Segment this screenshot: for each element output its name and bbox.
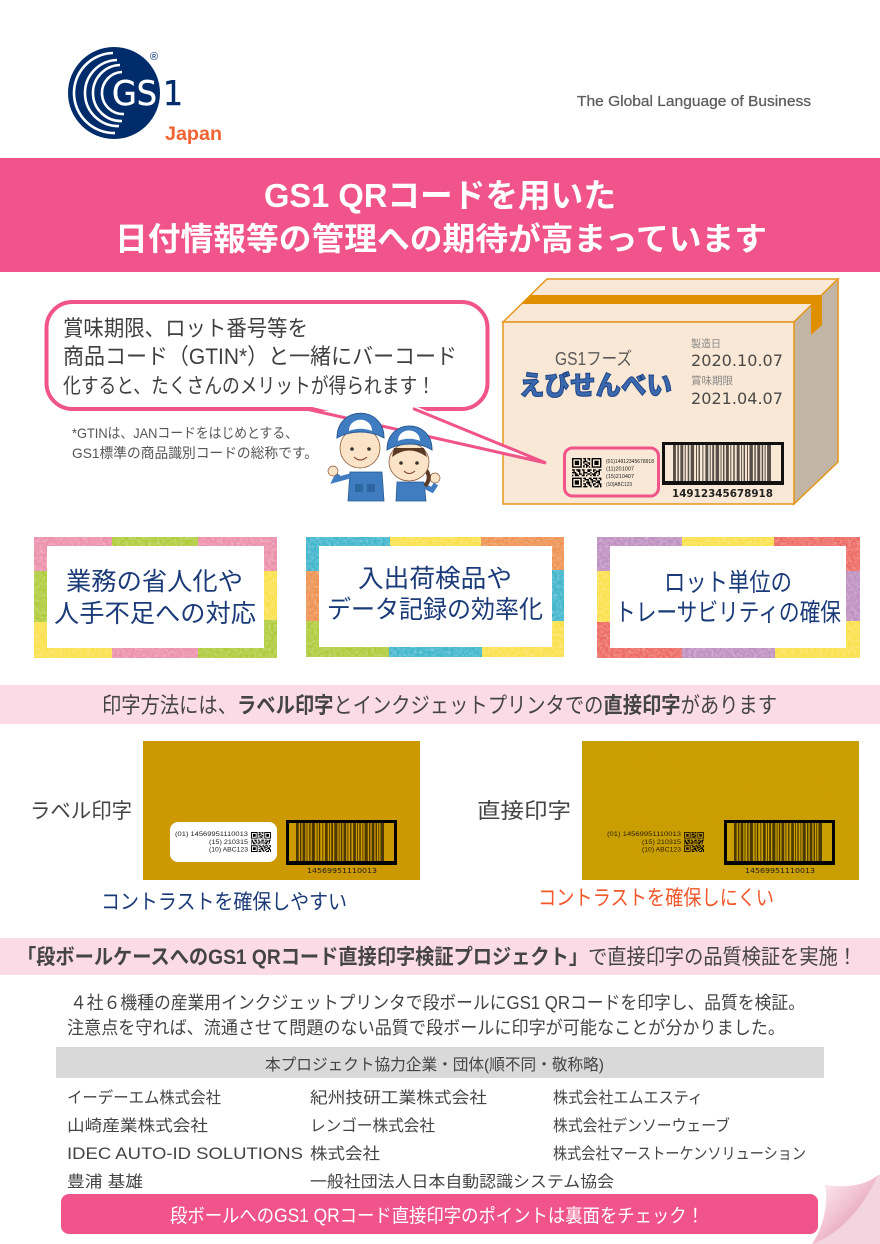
panel: label printing example: (15) 210315	[209, 839, 248, 846]
worker: woman	[387, 426, 440, 501]
illustration: cardboard box: (01)14912345678918	[606, 459, 654, 465]
list: partner organisations: 紀州技研工業株式会社	[310, 1089, 487, 1107]
speech bubble	[46, 302, 546, 463]
heading: verification project	[0, 938, 880, 975]
panel: label printing example: ラベル印字	[30, 800, 132, 823]
panel: direct printing example: (15) 210315	[642, 839, 681, 846]
speech bubble: 賞味期限、ロット番号等を	[63, 316, 308, 341]
panel: direct printing example	[477, 741, 859, 910]
panel: traceability	[597, 537, 860, 658]
list: partner organisations: 株式会社マーストーケンソリューション	[553, 1145, 806, 1163]
footnote: GTIN: *GTINは、JANコードをはじめとする、	[72, 425, 298, 441]
text block: project summary: 注意点を守れば、流通させて問題のない品質で段ボールに印字が可能なことが分かりました。	[67, 1018, 785, 1038]
panel: label printing example: コントラストを確保しやすい	[101, 891, 347, 914]
list: partner organisations: 一般社団法人日本自動認識システム協会	[310, 1173, 614, 1191]
list: partner organisations: 株式会社	[310, 1145, 380, 1163]
heading: printing methods	[0, 685, 880, 724]
panel: label printing example: (10) ABC123	[209, 846, 248, 854]
panel: label printing example	[30, 741, 420, 914]
panel: label printing example: (01) 14569951110013	[175, 831, 248, 838]
list: partner organisations: 株式会社デンソーウェーブ	[553, 1116, 730, 1135]
panel: labor saving: 人手不足への対応	[54, 600, 256, 628]
panel: direct printing example: 14569951110013	[745, 867, 815, 875]
illustration: cardboard box	[503, 279, 838, 504]
illustration: two workers	[328, 413, 440, 501]
illustration: cardboard box: 14912345678918	[672, 488, 773, 500]
panel: traceability: トレーサビリティの確保	[615, 599, 841, 627]
illustration: cardboard box: (10)ABC123	[606, 482, 632, 488]
speech bubble: 商品コード（GTIN*）と一緒にバーコード	[63, 344, 457, 369]
panel: labor saving	[34, 537, 277, 658]
title banner: GS1 QRコードを用いた	[264, 177, 616, 214]
heading: verification project: 「段ボールケースへのGS1 QRコード直接印字検証プロジェクト」で直接印字の品質検証を実施！	[17, 946, 857, 969]
logo: GS1 Japan: 1	[163, 74, 183, 114]
panel: direct printing example: (10) ABC123	[642, 846, 681, 854]
heading: partner organisations	[56, 1047, 824, 1078]
heading: partner organisations: 本プロジェクト協力企業・団体(順不同・敬称略)	[265, 1056, 604, 1074]
callout button	[61, 1194, 818, 1234]
list: partner organisations	[67, 1088, 806, 1191]
illustration: cardboard box: えびせんべい	[519, 371, 672, 401]
panel: direct printing example: コントラストを確保しにくい	[538, 887, 774, 910]
panel: direct printing example: 直接印字	[477, 800, 571, 823]
panel: direct printing example: (01) 14569951110013	[607, 831, 681, 838]
illustration: cardboard box: 2021.04.07	[691, 389, 783, 408]
illustration: cardboard box: (11)201007	[606, 466, 634, 472]
speech bubble: 化すると、たくさんのメリットが得られます！	[63, 375, 435, 398]
illustration: cardboard box: 2020.10.07	[691, 351, 783, 370]
list: partner organisations: 株式会社エムエスティ	[553, 1089, 703, 1107]
illustration: cardboard box: (15)210407	[606, 474, 634, 480]
footnote: GTIN: GS1標準の商品識別コードの総称です。	[72, 445, 318, 461]
tagline: The Global Language of Business	[577, 94, 811, 110]
logo: GS1 Japan: GS	[112, 74, 157, 114]
panel: shipping inspection: データ記録の効率化	[327, 596, 543, 624]
text block: project summary: ４社６機種の産業用インクジェットプリンタで段ボールにGS1 QRコードを印字し、品質を検証。	[70, 993, 805, 1013]
text block: project summary	[67, 993, 805, 1038]
illustration: cardboard box: 賞味期限	[691, 374, 733, 387]
title banner	[0, 158, 880, 272]
panel: shipping inspection	[306, 537, 564, 657]
panel: shipping inspection: 入出荷検品や	[358, 565, 512, 593]
worker: man	[328, 413, 384, 501]
logo: GS1 Japan	[68, 47, 222, 145]
list: partner organisations: レンゴー株式会社	[310, 1116, 435, 1135]
list: partner organisations: 豊浦 基雄	[67, 1173, 143, 1191]
panel: traceability: ロット単位の	[664, 569, 792, 597]
logo: GS1 Japan: ®	[150, 51, 158, 63]
heading: printing methods: 印字方法には、ラベル印字とインクジェットプリンタでの直接印字があります	[102, 693, 777, 718]
list: partner organisations: IDEC AUTO-ID SOLUTIONS	[67, 1144, 303, 1163]
list: partner organisations: イーデーエム株式会社	[67, 1088, 221, 1107]
footnote: GTIN	[72, 425, 318, 461]
callout button: 段ボールへのGS1 QRコード直接印字のポイントは裏面をチェック！	[170, 1205, 704, 1227]
illustration: cardboard box: GS1フーズ	[555, 349, 632, 369]
list: partner organisations: 山崎産業株式会社	[67, 1117, 208, 1135]
logo: GS1 Japan: Japan	[165, 124, 222, 145]
panel: label printing example: 14569951110013	[307, 867, 377, 875]
illustration: cardboard box: 製造日	[691, 337, 721, 350]
page curl	[812, 1175, 880, 1244]
title banner: 日付情報等の管理への期待が高まっています	[115, 221, 767, 257]
panel: labor saving: 業務の省人化や	[66, 568, 243, 596]
